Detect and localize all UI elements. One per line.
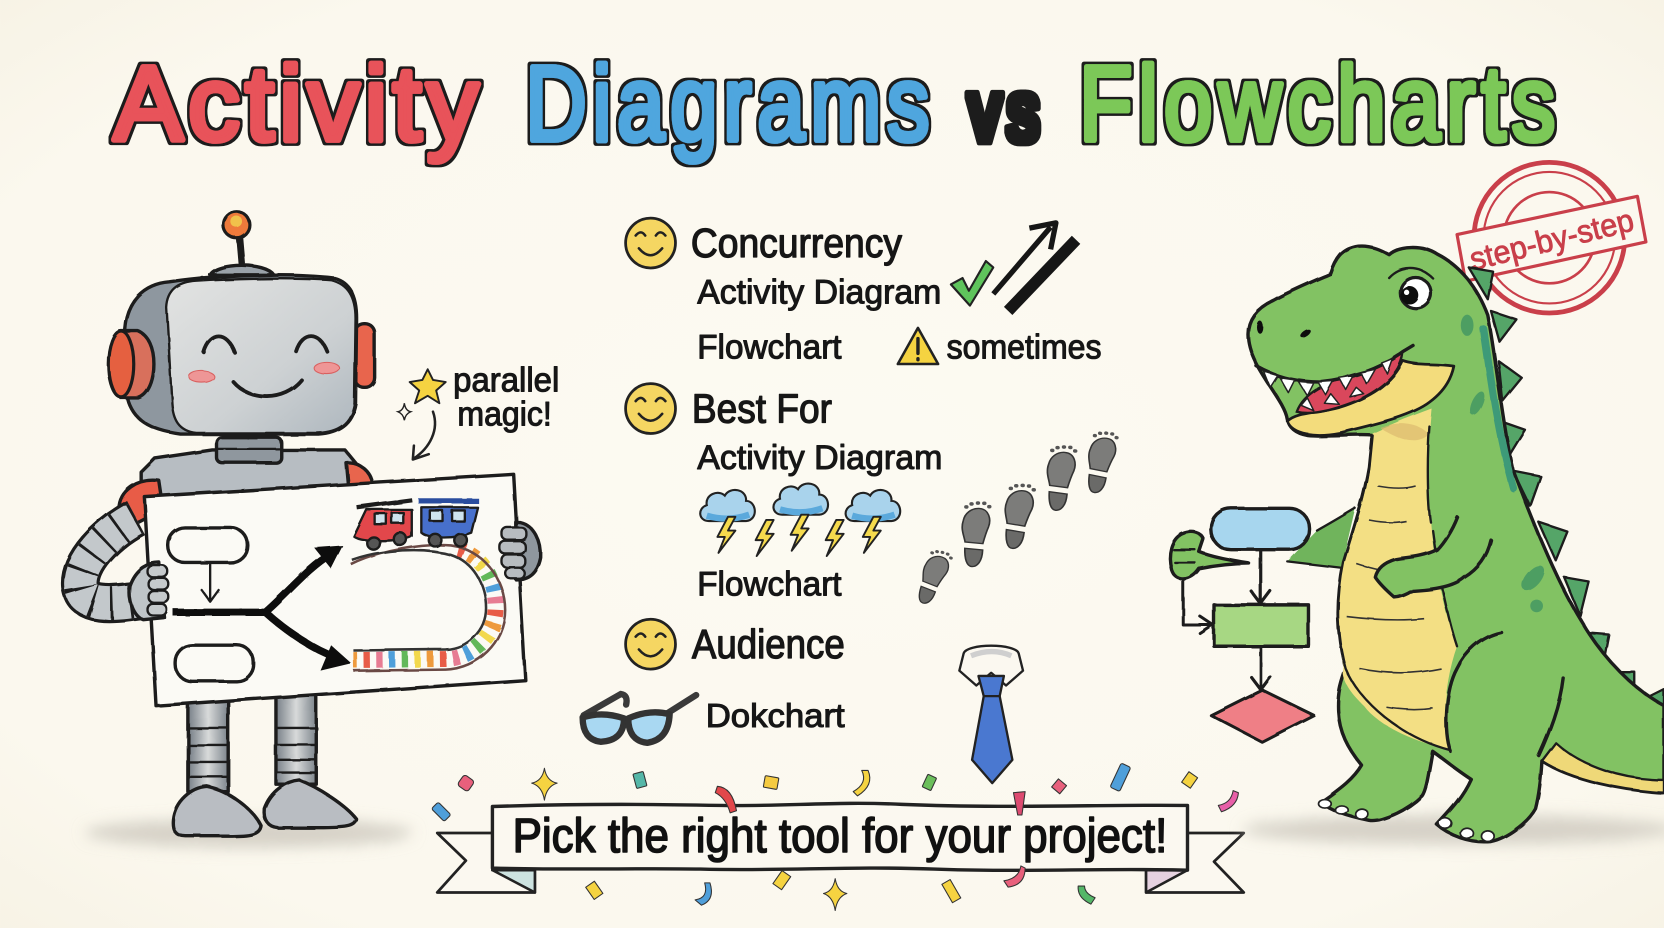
callout curved arrow: [413, 412, 435, 459]
callout: parallel magic: [398, 362, 559, 459]
robot legs: [188, 695, 316, 792]
fork arrows: [173, 545, 351, 671]
heading: concurrency: Concurrency: [691, 220, 903, 266]
banner right fold: [1146, 870, 1187, 892]
robot eyes: [204, 336, 327, 352]
robot right hand: [500, 522, 540, 579]
label: flowchart: Flowchart: [697, 329, 842, 367]
banner right tail: [1146, 833, 1244, 892]
robot arm: [81, 518, 143, 603]
confetti: [431, 763, 1238, 822]
icon: green check: [951, 261, 993, 306]
robot shadow: [85, 818, 414, 848]
icon: necktie: [959, 646, 1023, 783]
icon: warning triangle: [898, 328, 938, 364]
robot neck: [217, 437, 281, 463]
robot torso: [141, 450, 369, 509]
flowchart start node: [1211, 508, 1310, 550]
label: garbled flowchart: Dokchart: [706, 697, 845, 734]
dino tail belly: [1542, 743, 1664, 793]
dino nostrils: [1256, 320, 1312, 339]
stamp rings: [1474, 162, 1625, 313]
flowchart process node: [1214, 605, 1308, 646]
stamp text: step-by-step: [1466, 202, 1637, 277]
heading: best for: Best For: [692, 385, 832, 431]
dino head crest: [1331, 246, 1374, 274]
dino arm outline: [1287, 508, 1355, 568]
smiley icon: [626, 218, 675, 268]
label: activity diagram: Activity Diagram: [697, 273, 941, 311]
title word: vs: vs: [969, 63, 1039, 158]
icon: glasses: [583, 694, 696, 743]
robot character: [81, 212, 540, 848]
flowchart held by dino: [1183, 508, 1314, 742]
dino mouth: [1256, 346, 1454, 435]
dino claws: [1318, 799, 1494, 842]
dino shadow: [1242, 815, 1664, 845]
dino back spines: [1469, 267, 1664, 709]
dino hand with wrist: [1170, 532, 1249, 579]
dino lower jaw: [1287, 361, 1454, 435]
flowchart arrow: [1251, 550, 1270, 604]
comparison: audience: [583, 619, 1023, 783]
robot face plate: [167, 279, 356, 433]
rainbow railway track: [351, 545, 505, 671]
callout star: [410, 369, 446, 403]
dino thigh: [1446, 632, 1563, 756]
robot left hand: [129, 562, 169, 620]
banner left fold: [492, 870, 535, 892]
dino small arm: [1375, 517, 1491, 596]
label: sometimes: sometimes: [947, 329, 1102, 367]
icon: storm clouds: [700, 484, 900, 556]
dino yellow belly: [1338, 409, 1457, 749]
icon: parallel arrows: [993, 223, 1076, 311]
comparison: best for: [626, 384, 1118, 607]
dino dark back stripe: [1484, 329, 1513, 488]
title: [114, 44, 1555, 163]
robot cheeks: [189, 362, 340, 383]
callout text: parallel: [453, 362, 559, 400]
confetti lower: [586, 786, 1095, 910]
dino back spots: [1461, 315, 1549, 612]
robot smile: [233, 380, 301, 396]
robot shoulders: [119, 462, 373, 525]
dino belly outline: [1338, 427, 1457, 750]
banner body: [492, 803, 1187, 870]
heading: audience: Audience: [692, 621, 845, 667]
robot right ear: [354, 324, 375, 387]
dinosaur character: [1170, 246, 1664, 845]
title word: Activity: Activity: [114, 45, 479, 163]
robot antenna: [210, 212, 274, 275]
label: flowchart: Flowchart: [697, 565, 842, 603]
stamp ribbon: [1457, 196, 1646, 281]
title word: Flowcharts: Flowcharts: [1079, 44, 1555, 163]
closing banner: [437, 803, 1244, 892]
dino reaching arm: [1287, 508, 1355, 568]
banner left tail: [437, 833, 535, 892]
dino eye: [1389, 268, 1433, 308]
comparison: concurrency: [626, 218, 1102, 367]
banner text: Pick the right tool for your project!: [513, 810, 1167, 863]
held board: [144, 474, 525, 706]
board second node: [175, 645, 254, 681]
label: activity diagram: Activity Diagram: [697, 439, 942, 477]
flowchart decision diamond: [1211, 690, 1314, 742]
board start node: [168, 527, 247, 562]
robot head: [125, 275, 357, 434]
smiley icon: [626, 619, 675, 669]
dino belly stripes: [1347, 486, 1441, 709]
dino neck shading: [1380, 424, 1429, 441]
smiley icon: [626, 384, 675, 433]
callout sparkle: [398, 403, 411, 420]
callout: parallel magic: magic!: [457, 396, 552, 434]
icon: footprints: [914, 431, 1118, 607]
flowchart side arrow: [1183, 582, 1213, 634]
flowchart arrow: [1251, 646, 1270, 690]
title word: Diagrams: Diagrams: [525, 45, 929, 163]
dino red mouth: [1297, 352, 1403, 413]
robot left ear: [108, 331, 154, 398]
board arrow down: [202, 562, 219, 602]
dino body: [1248, 246, 1664, 842]
toy train: [353, 500, 479, 550]
stamp: step-by-step: [1457, 162, 1646, 313]
dino teeth: [1264, 359, 1392, 411]
robot feet: [173, 780, 357, 836]
dino upper lip: [1256, 346, 1414, 382]
